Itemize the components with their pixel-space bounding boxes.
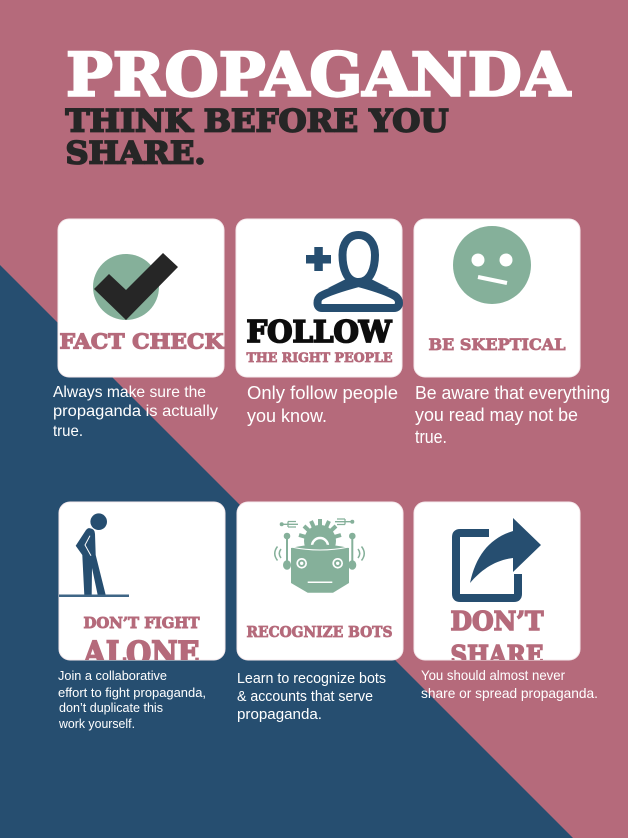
text: don't share description: share or spread propaganda. bbox=[421, 685, 598, 701]
text: skeptical description: you read may not be bbox=[415, 405, 578, 425]
icon: share arrow bbox=[456, 518, 541, 598]
text: don't fight description: don’t duplicate this bbox=[59, 701, 163, 715]
icon: lone figure bbox=[59, 513, 129, 597]
heading: don't share (clipped) bbox=[450, 610, 544, 660]
heading: fact check: FACT CHECK bbox=[60, 329, 225, 353]
text: recognize bots description bbox=[237, 671, 386, 723]
panel: don't fight alone bbox=[59, 502, 225, 672]
icon: skeptical face bbox=[453, 226, 531, 304]
icon: check mark on green circle bbox=[93, 253, 178, 320]
heading: the right people: THE RIGHT PEOPLE bbox=[246, 351, 393, 366]
text: follow description: Only follow people bbox=[247, 383, 398, 403]
text: don't share description bbox=[421, 667, 598, 701]
heading: alone (clipped): ALONE bbox=[83, 634, 200, 672]
text: follow description bbox=[247, 383, 398, 426]
text: don't fight description bbox=[58, 669, 206, 731]
text: skeptical description: Be aware that everything bbox=[415, 383, 610, 403]
heading: don't share (clipped): DON’T bbox=[450, 607, 544, 637]
subtitle: SHARE. bbox=[66, 136, 206, 172]
heading: recognize bots: RECOGNIZE BOTS bbox=[246, 623, 392, 641]
heading: don't fight: DON’T FIGHT bbox=[84, 615, 200, 632]
text: don't share description: You should almost never bbox=[421, 667, 565, 683]
panel: don't share bbox=[414, 502, 580, 671]
text: follow description: you know. bbox=[247, 406, 327, 426]
panel: follow the right people bbox=[236, 219, 402, 377]
heading: follow: FOLLOW bbox=[246, 314, 392, 349]
subtitle bbox=[66, 104, 448, 172]
text: recognize bots description: Learn to recognize bots bbox=[237, 671, 386, 687]
text: fact check description: true. bbox=[53, 423, 83, 440]
text: recognize bots description: & accounts that serve bbox=[237, 689, 373, 705]
text: fact check description: propaganda is actually bbox=[53, 403, 218, 420]
panel: be skeptical bbox=[414, 219, 580, 377]
panel: recognize bots bbox=[237, 502, 403, 660]
text: don't fight description: effort to fight propaganda, bbox=[58, 686, 206, 700]
panel: fact check bbox=[58, 219, 225, 377]
icon: robot bbox=[275, 519, 364, 593]
heading: don't share (clipped): SHARE bbox=[450, 641, 544, 671]
background: blue diagonal triangle bbox=[0, 265, 573, 838]
text: skeptical description: true. bbox=[415, 427, 447, 447]
text: fact check description: Always make sure the bbox=[53, 384, 206, 401]
text: fact check description bbox=[53, 384, 218, 440]
text: skeptical description bbox=[415, 383, 610, 447]
icon: add person bbox=[306, 235, 399, 308]
text: don't fight description: Join a collaborative bbox=[58, 669, 167, 683]
text: recognize bots description: propaganda. bbox=[237, 707, 322, 723]
heading: be skeptical: BE SKEPTICAL bbox=[428, 335, 566, 354]
text: don't fight description: work yourself. bbox=[58, 717, 135, 731]
subtitle: THINK BEFORE YOU bbox=[66, 104, 448, 140]
title: PROPAGANDA bbox=[66, 40, 571, 110]
